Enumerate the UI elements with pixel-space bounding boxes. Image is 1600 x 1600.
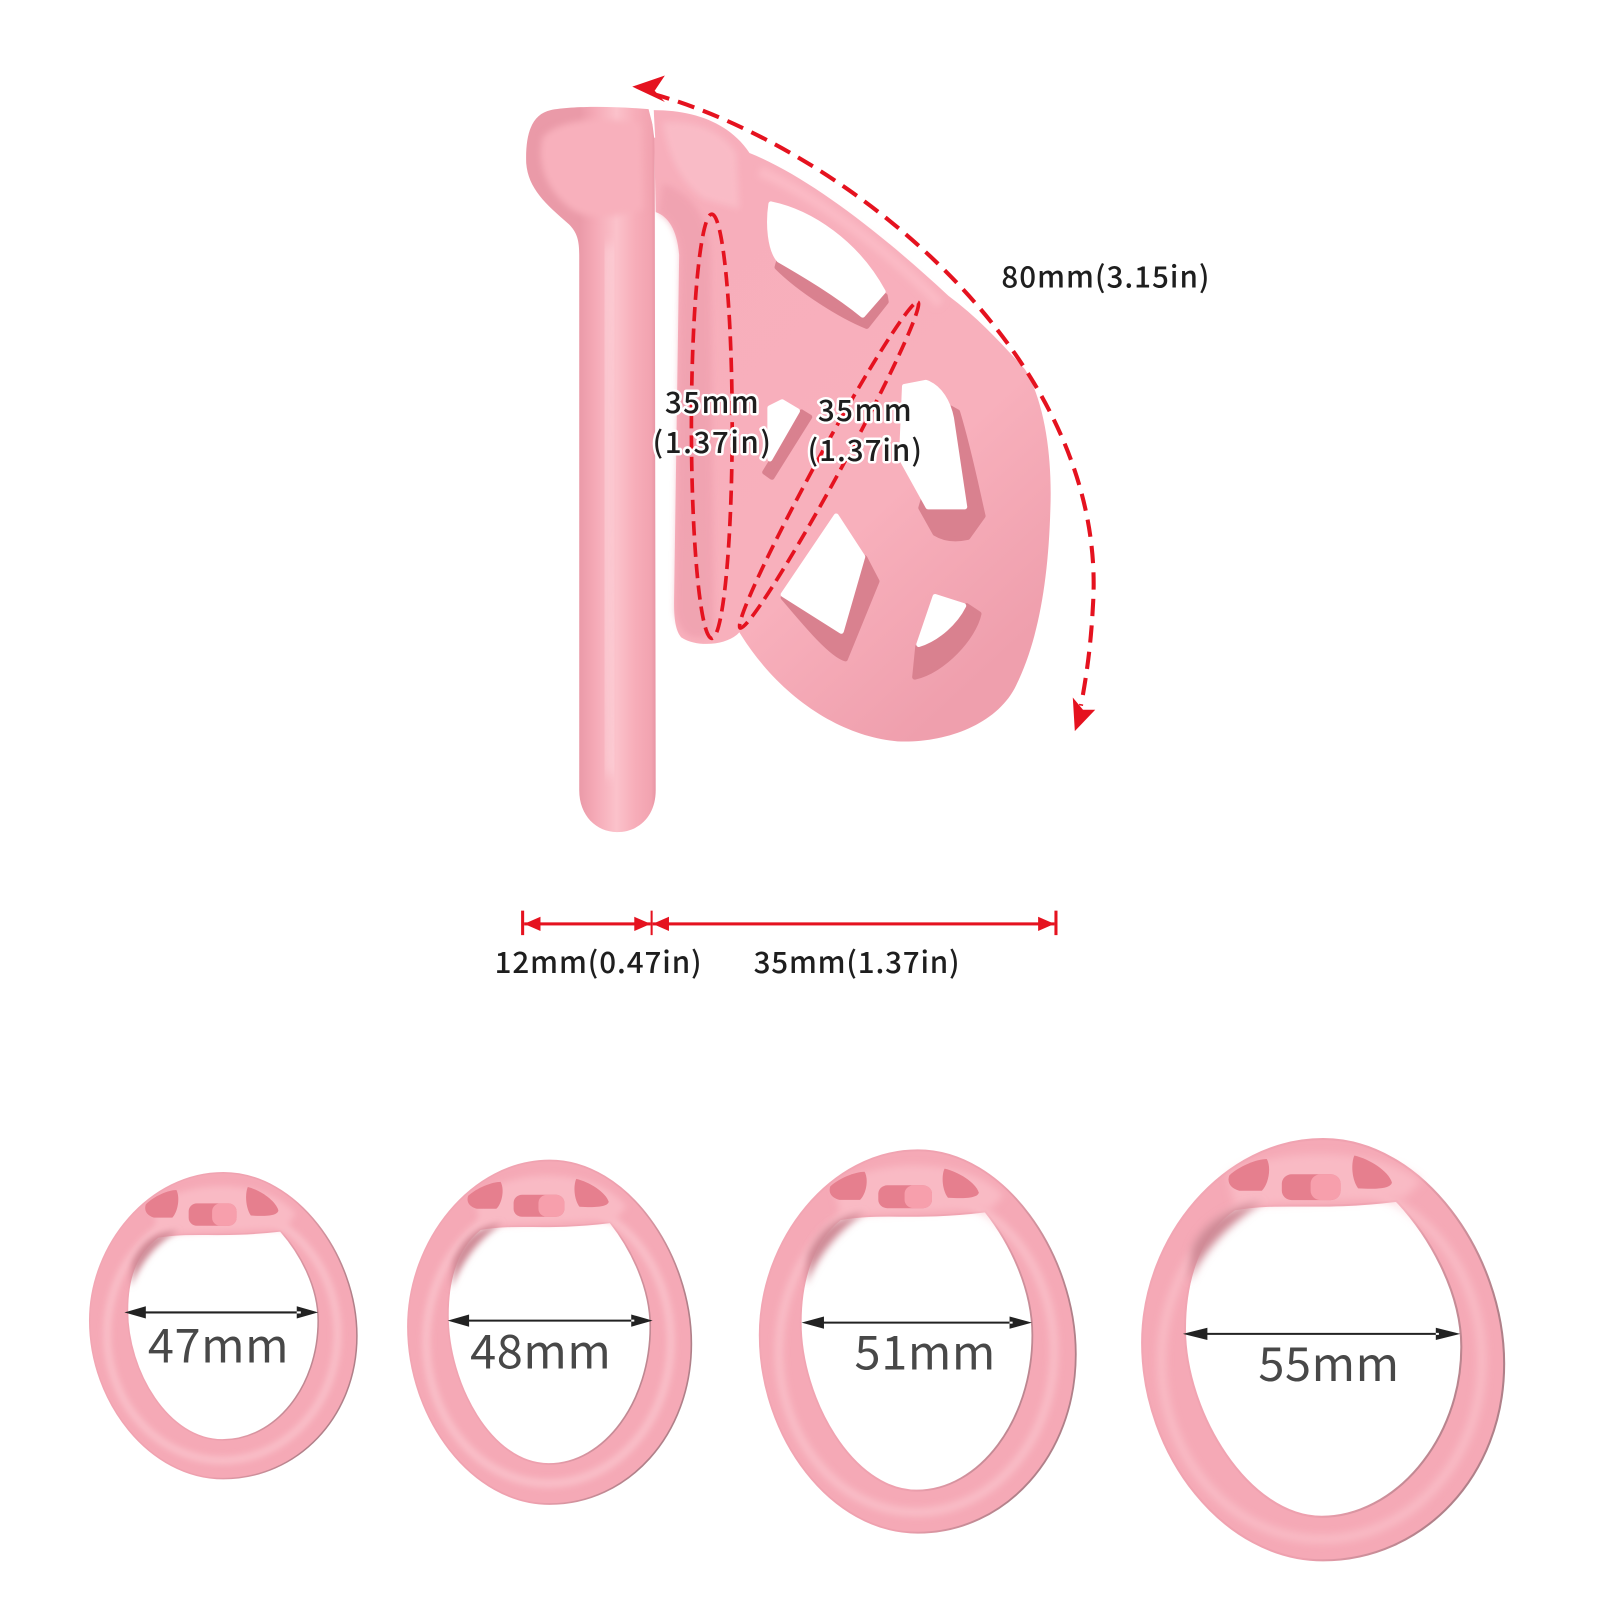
label: 35mm: 35mm(1.37in)	[754, 939, 960, 982]
label: left 35mm	[653, 379, 771, 462]
dashed circumference left	[691, 214, 732, 638]
label 55mm: 55mm	[1258, 1327, 1399, 1395]
slots 47mm	[145, 1187, 278, 1226]
ring 55mm	[1142, 1139, 1504, 1560]
label 51mm: 51mm	[855, 1316, 995, 1384]
openings	[770, 204, 965, 644]
cage body	[654, 110, 1051, 742]
label 47mm: 47mm	[148, 1308, 289, 1376]
slots 51mm	[830, 1169, 979, 1208]
top rim highlight	[760, 171, 940, 304]
arrow 51mm	[802, 1317, 1032, 1329]
cap highlight	[663, 122, 739, 209]
dashed circumference diagonal	[729, 296, 929, 634]
arrow 55mm	[1183, 1328, 1460, 1340]
label: 80mm length: 80mm(3.15in)	[1001, 254, 1209, 297]
ring 48mm	[408, 1160, 691, 1504]
opening inner walls	[765, 260, 983, 677]
label: left 35mm: 35mm	[665, 379, 759, 422]
ring 47mm	[90, 1173, 357, 1479]
label: diagonal 35mm: (1.37in)	[808, 427, 922, 470]
label: left 35mm: (1.37in)	[653, 419, 771, 462]
device side view	[526, 106, 1051, 832]
slit between pieces	[651, 106, 655, 138]
slots 48mm	[468, 1179, 609, 1217]
label: diagonal 35mm	[808, 387, 922, 470]
slots 55mm	[1229, 1156, 1392, 1200]
cage left strip shading	[659, 184, 714, 638]
curved length arrow	[632, 75, 1095, 731]
arrow 47mm	[124, 1306, 318, 1319]
label: diagonal 35mm: 35mm	[818, 387, 912, 430]
arrow 48mm	[448, 1314, 653, 1327]
ring 51mm	[760, 1150, 1076, 1533]
label 48mm: 48mm	[470, 1315, 611, 1383]
ring bar with cap	[526, 107, 656, 832]
label: 12mm: 12mm(0.47in)	[495, 939, 702, 982]
width dimension arrows	[521, 911, 1057, 935]
